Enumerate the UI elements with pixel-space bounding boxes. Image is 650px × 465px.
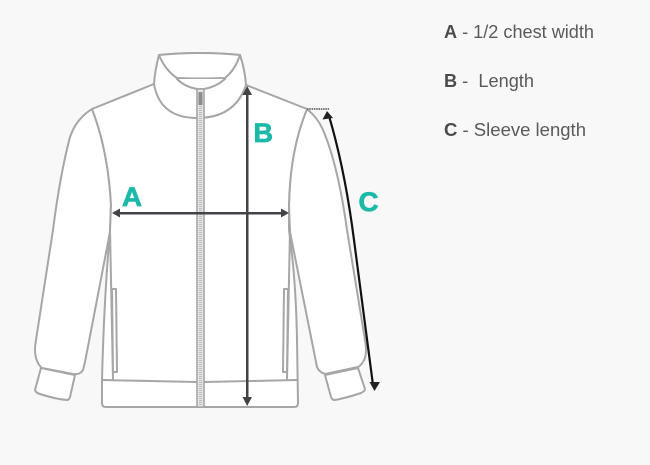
arrow C: sleeve length bbox=[307, 109, 380, 391]
left cuff bbox=[35, 368, 75, 400]
collar bbox=[154, 53, 246, 118]
jacket body bbox=[92, 55, 307, 407]
letter A: A bbox=[122, 182, 142, 212]
arrow A: chest width bbox=[112, 208, 289, 218]
collar opening bbox=[159, 53, 240, 78]
left sleeve bbox=[35, 109, 111, 374]
legend item B: B - Length bbox=[444, 71, 534, 91]
letter C: C bbox=[358, 187, 378, 217]
zipper bbox=[197, 89, 204, 407]
arrow B: length bbox=[242, 86, 252, 406]
front neckline bbox=[177, 79, 225, 89]
legend item A: A - 1/2 chest width bbox=[444, 22, 594, 42]
letter B: B bbox=[254, 118, 273, 148]
right sleeve bbox=[289, 109, 366, 374]
jacket illustration bbox=[35, 53, 366, 407]
left pocket bbox=[112, 289, 117, 372]
right cuff bbox=[325, 368, 365, 400]
right pocket bbox=[283, 289, 288, 372]
hem and side seams bbox=[103, 230, 297, 382]
legend item C: C - Sleeve length bbox=[444, 120, 586, 140]
